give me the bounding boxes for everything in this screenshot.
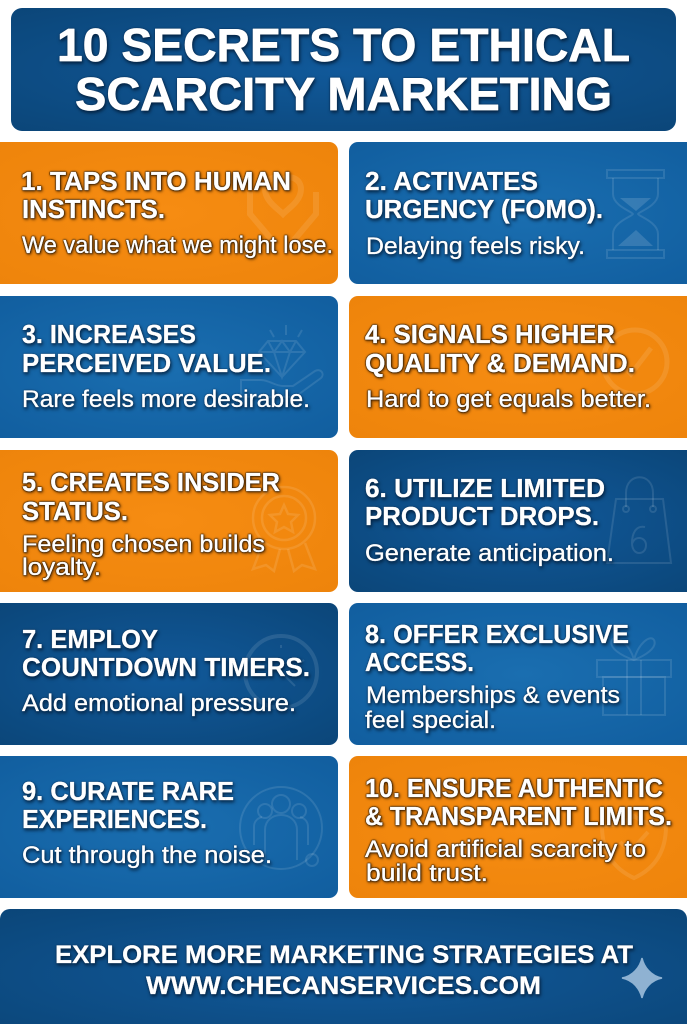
heading: 2. ACTIVATES xyxy=(365,166,538,196)
heading: 7. EMPLOY xyxy=(22,624,158,654)
icon: countdown timer xyxy=(245,636,317,708)
heading xyxy=(22,776,234,834)
heading xyxy=(365,473,605,531)
heading: 10. ENSURE AUTHENTIC xyxy=(365,773,663,803)
panel: 5 insider status xyxy=(0,450,338,592)
heading: 4. SIGNALS HIGHER xyxy=(365,319,615,349)
heading: 8. OFFER EXCLUSIVE xyxy=(365,619,629,649)
description xyxy=(365,682,620,734)
heading: 1. TAPS INTO HUMAN xyxy=(21,166,291,196)
description: Avoid artificial scarcity to xyxy=(365,836,646,863)
icon: diamond in hand xyxy=(241,325,323,397)
panel: 9 rare experiences xyxy=(0,756,338,898)
heading xyxy=(365,773,672,831)
footer call to action xyxy=(55,941,633,1000)
heading: QUALITY & DEMAND. xyxy=(365,348,635,378)
panel: 1 human instincts xyxy=(0,142,338,284)
heading xyxy=(22,319,271,378)
icon: hands holding heart xyxy=(250,177,316,240)
heading: & TRANSPARENT LIMITS. xyxy=(365,801,672,831)
heading: 5. CREATES INSIDER xyxy=(22,467,280,497)
icon: shopping bag xyxy=(607,477,671,563)
heading xyxy=(21,166,291,224)
title banner xyxy=(11,8,676,131)
description: Rare feels more desirable. xyxy=(22,386,310,413)
heading: EXPERIENCES. xyxy=(22,804,207,834)
panel: 10 authentic limits xyxy=(349,756,687,898)
heading: 6. UTILIZE LIMITED xyxy=(365,473,605,503)
heading: INSTINCTS. xyxy=(22,194,165,224)
icon: shield xyxy=(602,816,666,878)
panel: 3 perceived value xyxy=(0,296,338,438)
footer banner xyxy=(0,909,687,1024)
panel: 4 quality and demand xyxy=(349,296,687,438)
description: Delaying feels risky. xyxy=(366,233,585,260)
heading: STATUS. xyxy=(22,496,128,526)
icon: sparkle star xyxy=(622,958,662,998)
description: build trust. xyxy=(366,860,488,887)
description: We value what we might lose. xyxy=(22,232,333,259)
description: feel special. xyxy=(365,707,496,734)
description: Feeling chosen builds xyxy=(22,531,265,558)
description xyxy=(365,836,646,887)
description: loyalty. xyxy=(22,554,101,581)
heading: 9. CURATE RARE xyxy=(22,776,234,806)
footer call to action: EXPLORE MORE MARKETING STRATEGIES AT xyxy=(55,941,633,969)
heading xyxy=(365,319,635,378)
heading: PERCEIVED VALUE. xyxy=(22,348,271,378)
heading xyxy=(365,619,629,677)
panel: 8 exclusive access xyxy=(349,603,687,745)
icon: gift box xyxy=(597,638,671,715)
panel: 6 limited product drops xyxy=(349,450,687,592)
title text: 10 SECRETS TO ETHICAL xyxy=(57,19,630,71)
heading: 3. INCREASES xyxy=(22,319,196,349)
description xyxy=(22,531,265,581)
heading xyxy=(22,467,280,526)
description: Hard to get equals better. xyxy=(366,386,651,413)
icon: hourglass xyxy=(607,170,664,258)
icon: award rosette xyxy=(253,487,315,571)
icon: group of people xyxy=(240,787,322,869)
title text: SCARCITY MARKETING xyxy=(75,68,612,120)
heading: PRODUCT DROPS. xyxy=(365,501,599,531)
description: Memberships & events xyxy=(366,682,620,709)
heading: COUNTDOWN TIMERS. xyxy=(22,652,310,682)
panel: 7 countdown timers xyxy=(0,603,338,745)
heading xyxy=(22,624,310,682)
footer call to action: WWW.CHECANSERVICES.COM xyxy=(146,972,541,1000)
heading: URGENCY (FOMO). xyxy=(365,194,603,224)
panel: 2 urgency xyxy=(349,142,687,284)
icon: quality badge xyxy=(603,330,667,394)
title text xyxy=(57,19,630,120)
heading: ACCESS. xyxy=(365,647,474,677)
description: Generate anticipation. xyxy=(365,540,614,567)
description: Add emotional pressure. xyxy=(22,690,296,717)
heading xyxy=(365,166,603,224)
description: Cut through the noise. xyxy=(22,842,272,869)
